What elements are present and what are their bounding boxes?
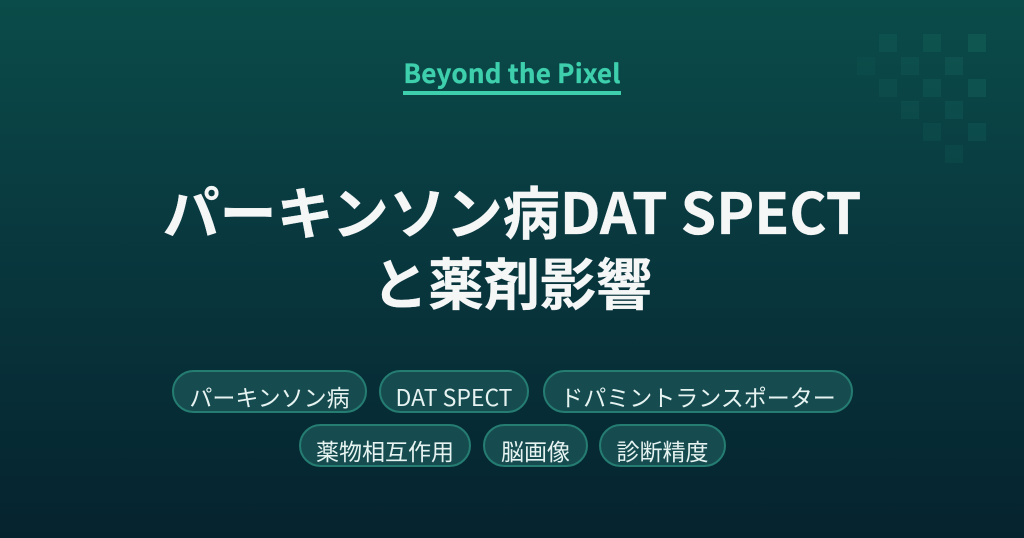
tag: DAT SPECT	[379, 370, 529, 413]
tag: ドパミントランスポーター: ドパミントランスポーター	[560, 379, 836, 413]
tag: 診断精度	[599, 424, 726, 467]
tag: パーキンソン病: パーキンソン病	[189, 379, 350, 413]
tag: 薬物相互作用	[299, 424, 471, 467]
tag: 診断精度: 診断精度	[616, 433, 708, 467]
tag: 脳画像	[483, 424, 588, 467]
decorative pixel grid	[923, 34, 986, 141]
tag: DAT SPECT: DAT SPECT	[396, 379, 512, 413]
tag: パーキンソン病	[172, 370, 367, 413]
title	[163, 169, 861, 322]
tag: 脳画像: 脳画像	[501, 433, 570, 467]
keyword tags	[172, 370, 853, 467]
title: と薬剤影響	[372, 241, 652, 322]
title: パーキンソン病DAT SPECT	[163, 169, 861, 251]
tag: 薬物相互作用: 薬物相互作用	[316, 433, 454, 467]
brand label: Beyond the Pixel	[403, 54, 621, 91]
